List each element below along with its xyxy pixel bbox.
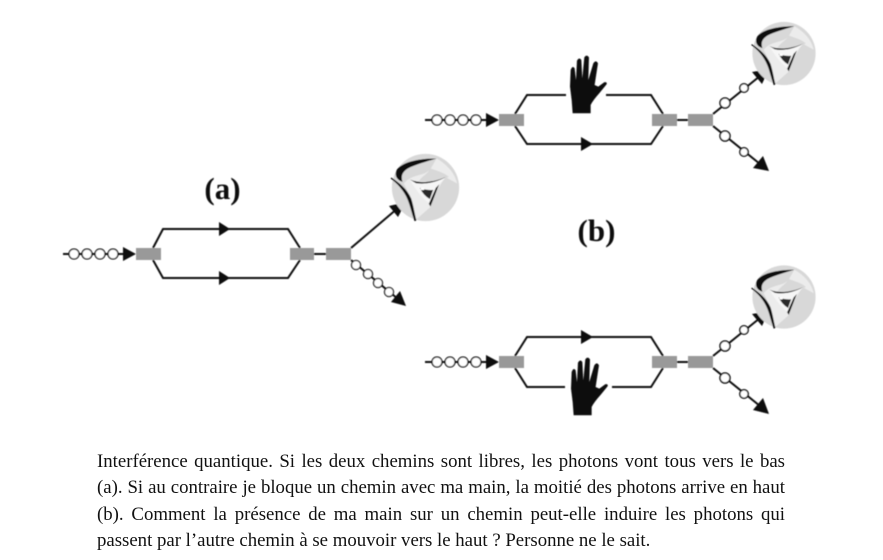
two paths bbox=[153, 222, 326, 285]
beam splitters bbox=[136, 248, 351, 260]
lower output with photons bbox=[351, 260, 406, 306]
label (a): (a) bbox=[204, 171, 241, 206]
caption text: Interférence quantique. Si les deux chemins sont libres, les photons vont tous vers le bas bbox=[97, 450, 785, 472]
icon: hand blocking upper path bbox=[570, 56, 607, 113]
icon: eye (a) bbox=[391, 154, 459, 221]
incoming photons bbox=[425, 355, 499, 369]
upper output arrow bbox=[351, 202, 406, 248]
paths with gap bbox=[515, 95, 688, 151]
caption text: passent par l’autre chemin à se mouvoir vers le haut ? Personne ne le sait. bbox=[97, 530, 650, 551]
panel: interferometer (b), upper path blocked bbox=[425, 22, 816, 171]
icon: eye (b bottom) bbox=[751, 265, 816, 329]
panel: interferometer (b), lower path blocked bbox=[425, 265, 816, 415]
caption text bbox=[97, 450, 785, 551]
caption text: (b). Comment la présence de ma main sur un chemin peut-elle induire les photons qui bbox=[97, 504, 785, 524]
panel: interferometer (a), both paths free bbox=[63, 154, 459, 306]
lower output with photons bbox=[713, 126, 769, 171]
paths with gap bbox=[515, 330, 688, 387]
beam splitters bbox=[499, 356, 713, 368]
lower output with photons bbox=[713, 368, 769, 414]
upper output with photons bbox=[713, 69, 769, 114]
incoming photons bbox=[425, 113, 499, 127]
upper output with photons bbox=[713, 311, 769, 356]
beam splitters bbox=[499, 114, 713, 126]
icon: hand blocking lower path bbox=[571, 358, 608, 415]
label (b): (b) bbox=[578, 213, 615, 248]
interference diagrams bbox=[62, 22, 816, 416]
icon: eye (b top) bbox=[751, 22, 816, 85]
incoming photons bbox=[63, 247, 136, 261]
caption text: (a). Si au contraire je bloque un chemin avec ma main, la moitié des photons arrive en haut bbox=[97, 477, 785, 498]
